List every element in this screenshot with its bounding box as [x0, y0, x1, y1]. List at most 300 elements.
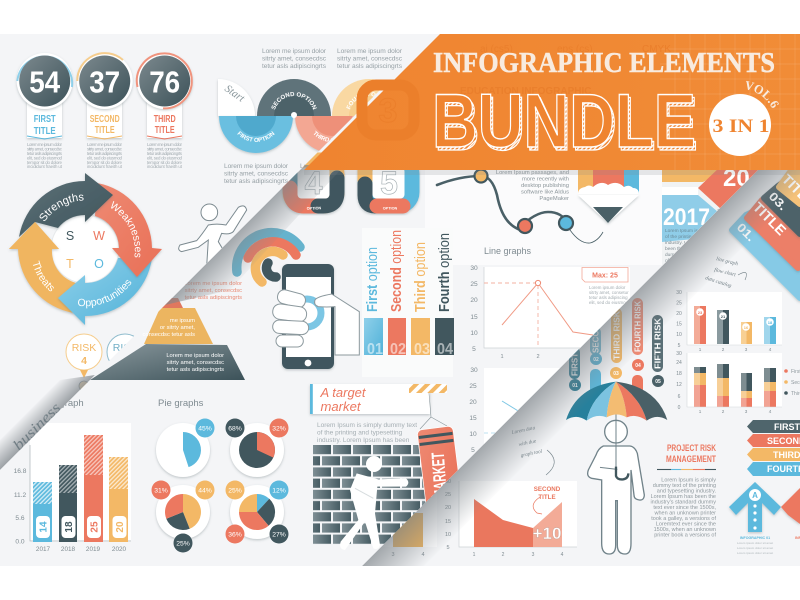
orange banner: [304, 34, 800, 170]
pyramid chart: Lorem me ipsum dolor: [166, 353, 224, 359]
badge 37 text: sitrty amet, consecdsc: [87, 146, 123, 152]
chain: start half disc: [218, 79, 255, 116]
bar graph: 25: [90, 521, 100, 533]
project risk heading: MANAGEMENT: [666, 454, 716, 465]
target market text: industry. Lorem Ipsum has been: [317, 437, 410, 444]
line graph one: [470, 265, 630, 360]
fold corner label: THIRD: [780, 147, 799, 153]
chain: fourth option: FOURTH OPTION: [346, 92, 376, 110]
bar chart: single: 5: [678, 343, 681, 349]
line graph two: 10: [469, 431, 477, 438]
salmon paragraph: sitrty amet, consecdsc: [185, 288, 242, 294]
timeline tiles: Lorem Ipsum is: [665, 228, 698, 234]
vol 6 curved label: VOL.6: [746, 80, 779, 108]
pie chart 12 27 36 25: 25%: [228, 488, 242, 494]
bar graph: 0.0: [15, 538, 25, 546]
badge 37: [77, 53, 133, 139]
orange banner: ai (cs5): [480, 44, 513, 55]
project risk paragraph: when an unknown printer: [654, 510, 716, 516]
chain text: lower: [224, 163, 319, 185]
badge 76 text: tempor sit do dolore: [147, 160, 183, 165]
timeline tiles: [662, 170, 758, 266]
badge 37 text: Lorem me ipsum dolor: [87, 142, 123, 147]
orange banner: eps (cs): [557, 44, 593, 55]
snake timeline: [437, 170, 603, 243]
line graph two: 5: [471, 447, 475, 454]
bar chart: single: 15: [676, 322, 682, 328]
arrow infographic A: A: [752, 491, 758, 500]
ribbon: titles: [747, 420, 800, 476]
bundle word: BUNDLE: [432, 79, 696, 164]
badge 37: TITLE: [95, 124, 115, 136]
bar graph: 5.6: [15, 515, 25, 522]
bar chart: single: 3: [745, 347, 748, 352]
stacked bar chart: 3: [745, 409, 748, 414]
chain text: lower: Lorem: [300, 163, 319, 170]
vertical option labels: [365, 230, 453, 312]
vertical option labels: First option: [365, 247, 381, 312]
target market text: [317, 422, 417, 444]
project risk paragraph: Lorem Ipsum is simply: [661, 478, 716, 484]
bar graph: 2019: [86, 546, 101, 553]
max callout: tetur asls adipiscing: [589, 295, 628, 300]
fold shadow: [362, 170, 800, 566]
line graph one: 10: [470, 330, 478, 337]
risk pills: 05: [655, 379, 661, 385]
badge 54 text: [27, 142, 63, 169]
arrow: threats head: [9, 222, 59, 249]
numbered ring 5: [365, 160, 412, 206]
stacked chart legend: [784, 369, 800, 397]
pie chart 12 27 36 25: 36%: [228, 532, 242, 538]
risk pills: FIRST: [570, 353, 580, 376]
arrow: strengths: [18, 173, 114, 238]
stacked bar chart: 2: [722, 409, 725, 414]
business script: business: [11, 400, 64, 454]
area chart: TITLE: [538, 494, 556, 501]
timeline text: PageMaker: [539, 196, 569, 202]
project risk heading: PROJECT RISK: [667, 443, 716, 454]
banner shadow: [304, 170, 800, 175]
layer: middle page: [14, 160, 770, 553]
line graph one: 30: [470, 265, 478, 272]
bar graph: 18: [64, 521, 75, 533]
stacked bar chart: 30: [676, 351, 682, 357]
pyramid chart: [90, 298, 245, 380]
chain text: top left: tetur asls adipiscingrts: [262, 63, 327, 70]
SWOT centre disc: S: [66, 229, 74, 243]
bar graph: [14, 423, 131, 553]
line graph title: Line graphs: [484, 246, 532, 256]
bar chart fragment at fold: 3: [391, 552, 395, 558]
SWOT centre disc: T: [66, 257, 74, 271]
3 in 1 seal: [709, 94, 771, 156]
pie chart 68 32: [226, 418, 288, 477]
badge 54 text: sitrty amet, consecdsc: [27, 146, 63, 152]
risk marker 4: 4: [81, 355, 87, 367]
arrow infographic A: Lorem ipsum dolor sit amet: [737, 541, 773, 545]
fold shadow: [165, 165, 345, 305]
SWOT centre disc: [51, 215, 119, 283]
area chart: 2: [502, 552, 505, 558]
bar chart fragment at fold: 4: [421, 552, 425, 558]
handwritten note with arrow: graph tool: [520, 448, 543, 459]
timeline tiles: 2017: [663, 204, 710, 231]
badge 76 text: sitrty amet, consecdsc: [147, 146, 183, 152]
line graph one: 15: [470, 314, 478, 321]
chain text: top left: Lorem me ipsum dolor: [262, 48, 327, 55]
pencil icon: [578, 170, 639, 223]
area chart: 1: [473, 552, 476, 558]
arrow: threats: Threats: [33, 260, 54, 292]
badge 37 text: incididunt fraeith ut: [87, 164, 123, 169]
badge 37 text: tetur asls adipiscingrts: [87, 151, 123, 156]
chain text: top left: sitrty amet, consecdsc: [262, 56, 327, 62]
target market text: Lorem Ipsum is simply dummy text: [317, 422, 417, 429]
risk pills: 04: [635, 363, 641, 369]
area chart: 20: [445, 505, 451, 511]
project risk heading: [666, 444, 716, 462]
line graph two: [469, 367, 584, 458]
chain: first option: FIRST OPTION: [237, 131, 275, 142]
bar chart: single: 25: [676, 300, 682, 306]
option number tiles: [364, 318, 454, 358]
arrow: weaknesses: [94, 183, 162, 278]
bar graph: 2017: [36, 546, 51, 553]
chain: second option: [257, 79, 331, 118]
timeline text: [496, 170, 569, 202]
badge 37 text: elit, sed do eiusmod: [87, 156, 123, 160]
badge 54: 54: [29, 64, 61, 100]
badge 76 text: tetur asls adipiscingrts: [147, 151, 183, 156]
chain: third option: THIRD OPTION: [314, 130, 332, 142]
timeline tiles: 20: [723, 165, 750, 192]
risk pills: 02: [593, 357, 599, 363]
stacked bar chart: 24: [676, 360, 682, 366]
area chart: 5: [446, 545, 450, 551]
pie graphs title: Pie graphs: [158, 398, 204, 409]
fold shadow: [0, 375, 95, 470]
bar graph: 11.2: [14, 492, 27, 499]
heading divider: [657, 468, 716, 470]
white panel: upper middle: [425, 170, 662, 265]
bar chart: single: 10: [676, 332, 682, 338]
risk pills: FOURTH RISK: [634, 301, 642, 352]
timeline tiles: industry. Lorem: [665, 240, 698, 246]
arrow infographic A: INFOGRAPHIC 01: [740, 536, 770, 540]
pie chart 68 32: 68%: [228, 426, 242, 432]
chain: fourth option: [332, 79, 380, 116]
handwritten note: flow chart: [714, 266, 737, 278]
pie chart 44 25 31: [152, 480, 214, 552]
bar chart: single: 21: [721, 314, 726, 319]
orange banner: EDUCATION INFOGRAPHIC: [460, 86, 591, 97]
chain: third option: [294, 116, 354, 152]
pie chart 12 27 36 25: [226, 480, 288, 544]
pie chart 12 27 36 25: 12%: [272, 488, 286, 494]
timeline tiles: of the typesetting di: [665, 258, 707, 264]
pie chart 45: [156, 418, 214, 477]
target market panel: A target: [320, 385, 367, 400]
badge 54 text: Lorem me ipsum dolor: [27, 142, 63, 147]
rotated title tags: 03.: [766, 189, 790, 213]
bar graph: 2018: [61, 546, 76, 553]
running figure: [179, 204, 247, 267]
brick wall: [313, 445, 438, 545]
punching bag: [417, 393, 463, 514]
option number tiles: 03: [414, 341, 430, 358]
salmon paragraph: [184, 281, 242, 301]
salmon paragraph: Lorem me ipsum dolor: [184, 281, 242, 287]
stacked bar chart: 0: [678, 405, 681, 411]
pyramid chart: sitrty amet, consecdsc: [167, 360, 224, 366]
punching bag: MARKET: [428, 452, 451, 499]
timeline text: more recently with: [522, 176, 569, 182]
target market text: of the printing and typesetting: [317, 430, 403, 436]
option number tiles: 04: [437, 341, 453, 358]
ring 5 numeral: 5: [380, 165, 398, 201]
arrow infographic A: Lorem ipsum dolor sit amet: [737, 551, 773, 555]
pyramid chart: consecdsc tetur asls: [142, 332, 195, 338]
badge 76 text: incididunt fraeith ut: [147, 164, 183, 169]
bar graph title: Bar graph: [42, 398, 84, 409]
bar chart fragment at fold: [392, 513, 424, 556]
badge 76: 76: [149, 64, 180, 100]
3 in 1 seal: 3 IN 1: [712, 116, 770, 137]
timeline tiles: dummy, then sad da: [665, 252, 708, 258]
stacked bar chart: 4: [769, 409, 772, 414]
arrow infographic A: [729, 482, 781, 555]
line graph one: 25: [470, 281, 478, 288]
area chart: 4: [561, 552, 564, 558]
badge 37: 37: [89, 64, 120, 100]
numbered ring 4: [290, 160, 337, 206]
project risk paragraph: took a galley, a versions of: [651, 516, 716, 522]
line graph one: 5: [472, 346, 476, 353]
project risk paragraph: Loremtext ever since the: [656, 522, 716, 528]
ring 5 numeral: [372, 170, 404, 210]
badge 76: [137, 53, 193, 139]
badge 54: TITLE: [34, 125, 56, 137]
area chart: SECOND: [534, 486, 561, 493]
option number tiles: 01: [367, 341, 383, 358]
hand holding phone: [272, 288, 359, 355]
arrow: strengths: Strengths: [40, 194, 84, 221]
bar chart: single: 1: [699, 347, 702, 352]
timeline text: Lorem Ipsum passages, and: [496, 170, 569, 176]
badge 54 text: elit, sed do eiusmod: [27, 156, 63, 160]
badge 76 text: elit, sed do eiusmod: [147, 156, 183, 160]
option panel background: [362, 228, 453, 377]
stacked bar chart: 12: [676, 382, 682, 388]
max callout: elit, sed do eiusmod: [589, 300, 629, 305]
orange banner: CMYK: [642, 44, 671, 55]
hazard stripe: [409, 384, 447, 393]
risk pills: [569, 298, 664, 400]
timeline tiles: been the simply sad: [665, 246, 708, 252]
risk pills: 03: [613, 371, 619, 377]
badge 54 text: tempor sit do dolore: [27, 160, 63, 165]
bar graph: 2020: [112, 546, 127, 553]
person holding umbrella: [587, 414, 645, 555]
layer: lower right page: [362, 170, 800, 566]
vertical option labels: Second option: [389, 230, 405, 312]
bar chart: single: 4: [769, 347, 772, 352]
pie chart 44 25 31: 31%: [154, 488, 168, 494]
line graph one: 20: [470, 297, 478, 304]
layer: upper left page: [0, 48, 402, 470]
timeline text: software like Aldus: [521, 190, 569, 196]
handwritten note: line graph: [716, 256, 739, 267]
area chart: +10: [533, 524, 561, 543]
salmon paragraph: tetur asls adipiscingrts: [185, 295, 242, 301]
bar graph: 14: [38, 521, 50, 533]
area chart: 15: [445, 519, 451, 525]
target market panel: market: [320, 399, 362, 414]
risk marker blue: [107, 334, 143, 370]
pyramid chart: or sitrty amet,: [160, 325, 195, 331]
bar chart: single: 16: [744, 325, 749, 330]
chain text: lower: tetur asls adipiscingrts: [224, 178, 289, 185]
risk marker 4: RISK: [72, 342, 96, 354]
timeline tiles: the industry's f dwulf: [665, 270, 709, 276]
bar graph: 20: [115, 521, 126, 533]
line graph two: 20: [469, 399, 477, 406]
project risk paragraph: Lorem Ipsum has been the: [651, 494, 716, 500]
chain text: top left: [262, 48, 327, 70]
banner title: INFOGRAPHIC ELEMENTS: [433, 47, 775, 79]
pie chart 44 25 31: 44%: [198, 488, 212, 494]
chain: first option: [218, 116, 294, 156]
max callout: sitrty amet, consetur: [589, 290, 629, 295]
chain: second option: SECOND OPTION: [271, 92, 317, 110]
orange banner: 3: [379, 92, 397, 130]
chain text: top right: Lorem me ipsum dolor: [337, 48, 403, 55]
project risk paragraph: dummy text of the printing: [653, 483, 716, 489]
target market panel: [310, 384, 430, 414]
semicircular arcs: [237, 233, 300, 282]
arrow infographic A: Lorem ipsum dolor sit amet: [737, 546, 773, 550]
smartphone: [282, 264, 334, 369]
project risk paragraph: industry's standard dummy: [650, 500, 716, 506]
badge 76: TITLE: [155, 124, 175, 136]
bar chart: single: 30: [676, 290, 682, 296]
timeline tiles: Lorem Ipsum has: [665, 264, 703, 270]
bar chart: single: 18: [768, 320, 773, 325]
pyramid chart: me ipsum: [170, 318, 195, 324]
area chart: 30: [445, 479, 451, 485]
max callout: [582, 268, 629, 305]
chain: start half disc: Start: [222, 83, 247, 105]
ring 4 numeral: 4: [305, 165, 323, 201]
stacked bar chart: 18: [676, 371, 682, 377]
ring 4 numeral: [298, 165, 330, 211]
risk pills: 01: [572, 383, 578, 389]
arrow: opportunities: Opportunities: [78, 280, 132, 308]
pie chart 44 25 31: 25%: [176, 540, 190, 548]
bar chart: single: 2: [722, 347, 725, 352]
pie chart 45: 45%: [198, 426, 212, 432]
badge 76: THIRD: [154, 113, 176, 125]
SWOT centre disc: W: [93, 229, 105, 243]
vertical option labels: Fourth option: [437, 233, 453, 312]
timeline text: desktop publishing: [521, 183, 569, 189]
max callout: Lorem ipsum dolor: [589, 285, 626, 290]
bar graph: 16.8: [14, 468, 27, 475]
risk pills: FIFTH RISK: [654, 318, 662, 369]
option number tiles: 02: [390, 341, 406, 358]
area chart: 3: [532, 552, 535, 558]
area chart: 10: [445, 532, 451, 538]
chain text: lower: Lorem me ipsum dolor: [224, 163, 289, 170]
handwritten note with arrow: with due: [518, 438, 537, 448]
project risk paragraph: text ever since the 1500s,: [653, 505, 716, 511]
bar chart: single: [676, 290, 782, 352]
chain text: top right: sitrty amet, consecdsc: [337, 56, 403, 62]
arrow: opportunities: [58, 258, 152, 326]
line graph two: 15: [469, 415, 477, 422]
line graph two: 30: [470, 367, 478, 374]
max callout: Max: 25: [592, 272, 618, 280]
handwritten note with arrow: [510, 425, 554, 475]
bar chart: single: 23: [698, 310, 703, 315]
rotated title tags: 01.: [734, 220, 758, 244]
handwritten note: data catalog: [704, 275, 732, 289]
handwritten note with arrow: Lorem data: [510, 425, 536, 436]
risk pills: THIRD RISK: [612, 311, 622, 360]
ring 5 numeral: OPTION: [383, 206, 398, 210]
badge 76 text: Lorem me ipsum dolor: [147, 142, 183, 147]
project risk paragraph: printer book a versions of: [654, 532, 716, 538]
arrow infographic B: [781, 488, 800, 540]
pie chart 12 27 36 25: 27%: [272, 532, 286, 538]
area chart: [445, 479, 577, 558]
badge 54 text: incididunt fraeith ut: [27, 164, 63, 169]
badge 54 text: tetur asls adipiscingrts: [27, 151, 63, 156]
rotated title tags: [732, 168, 800, 298]
area chart: 25: [445, 492, 451, 498]
badge 76 text: [147, 142, 183, 169]
badge 54: FIRST: [34, 113, 56, 125]
risk pills: SECOND: [592, 319, 600, 353]
line graph one: 2: [536, 354, 540, 360]
pie chart 68 32: 32%: [272, 426, 286, 432]
bundle extrusion: BUNDLE: [434, 82, 698, 167]
chain text: top right: tetur asls adipiscingrts: [337, 63, 403, 70]
arrow: weaknesses: Weaknesses: [111, 201, 140, 258]
project risk paragraph: [650, 478, 716, 538]
pyramid chart: tetur asls adipiscingrts: [167, 367, 224, 373]
line graph two: 25: [469, 383, 477, 390]
handwritten note: [704, 256, 746, 289]
badge 54: [17, 53, 73, 139]
stacked bar chart: 6: [678, 394, 681, 400]
rotated title tags: TITLE: [750, 199, 789, 238]
umbrella canopy: [566, 382, 667, 421]
chain text: top right: [337, 48, 403, 70]
vertical option labels: Third option: [413, 242, 429, 312]
punching figure: [340, 456, 408, 550]
ring 4 numeral: OPTION: [307, 206, 322, 211]
badge 37 text: tempor sit do dolore: [87, 160, 123, 165]
project risk paragraph: 1500s, when an unknown: [654, 527, 716, 533]
risk marker blue: RISK: [113, 342, 137, 354]
badge 37: SECOND: [90, 113, 120, 125]
chain text: lower: sitrty amet, consecdsc: [224, 170, 289, 178]
project risk paragraph: and typesetting industry.: [657, 488, 716, 494]
stacked bar chart: 1: [699, 409, 702, 414]
SWOT centre disc: O: [94, 257, 104, 271]
